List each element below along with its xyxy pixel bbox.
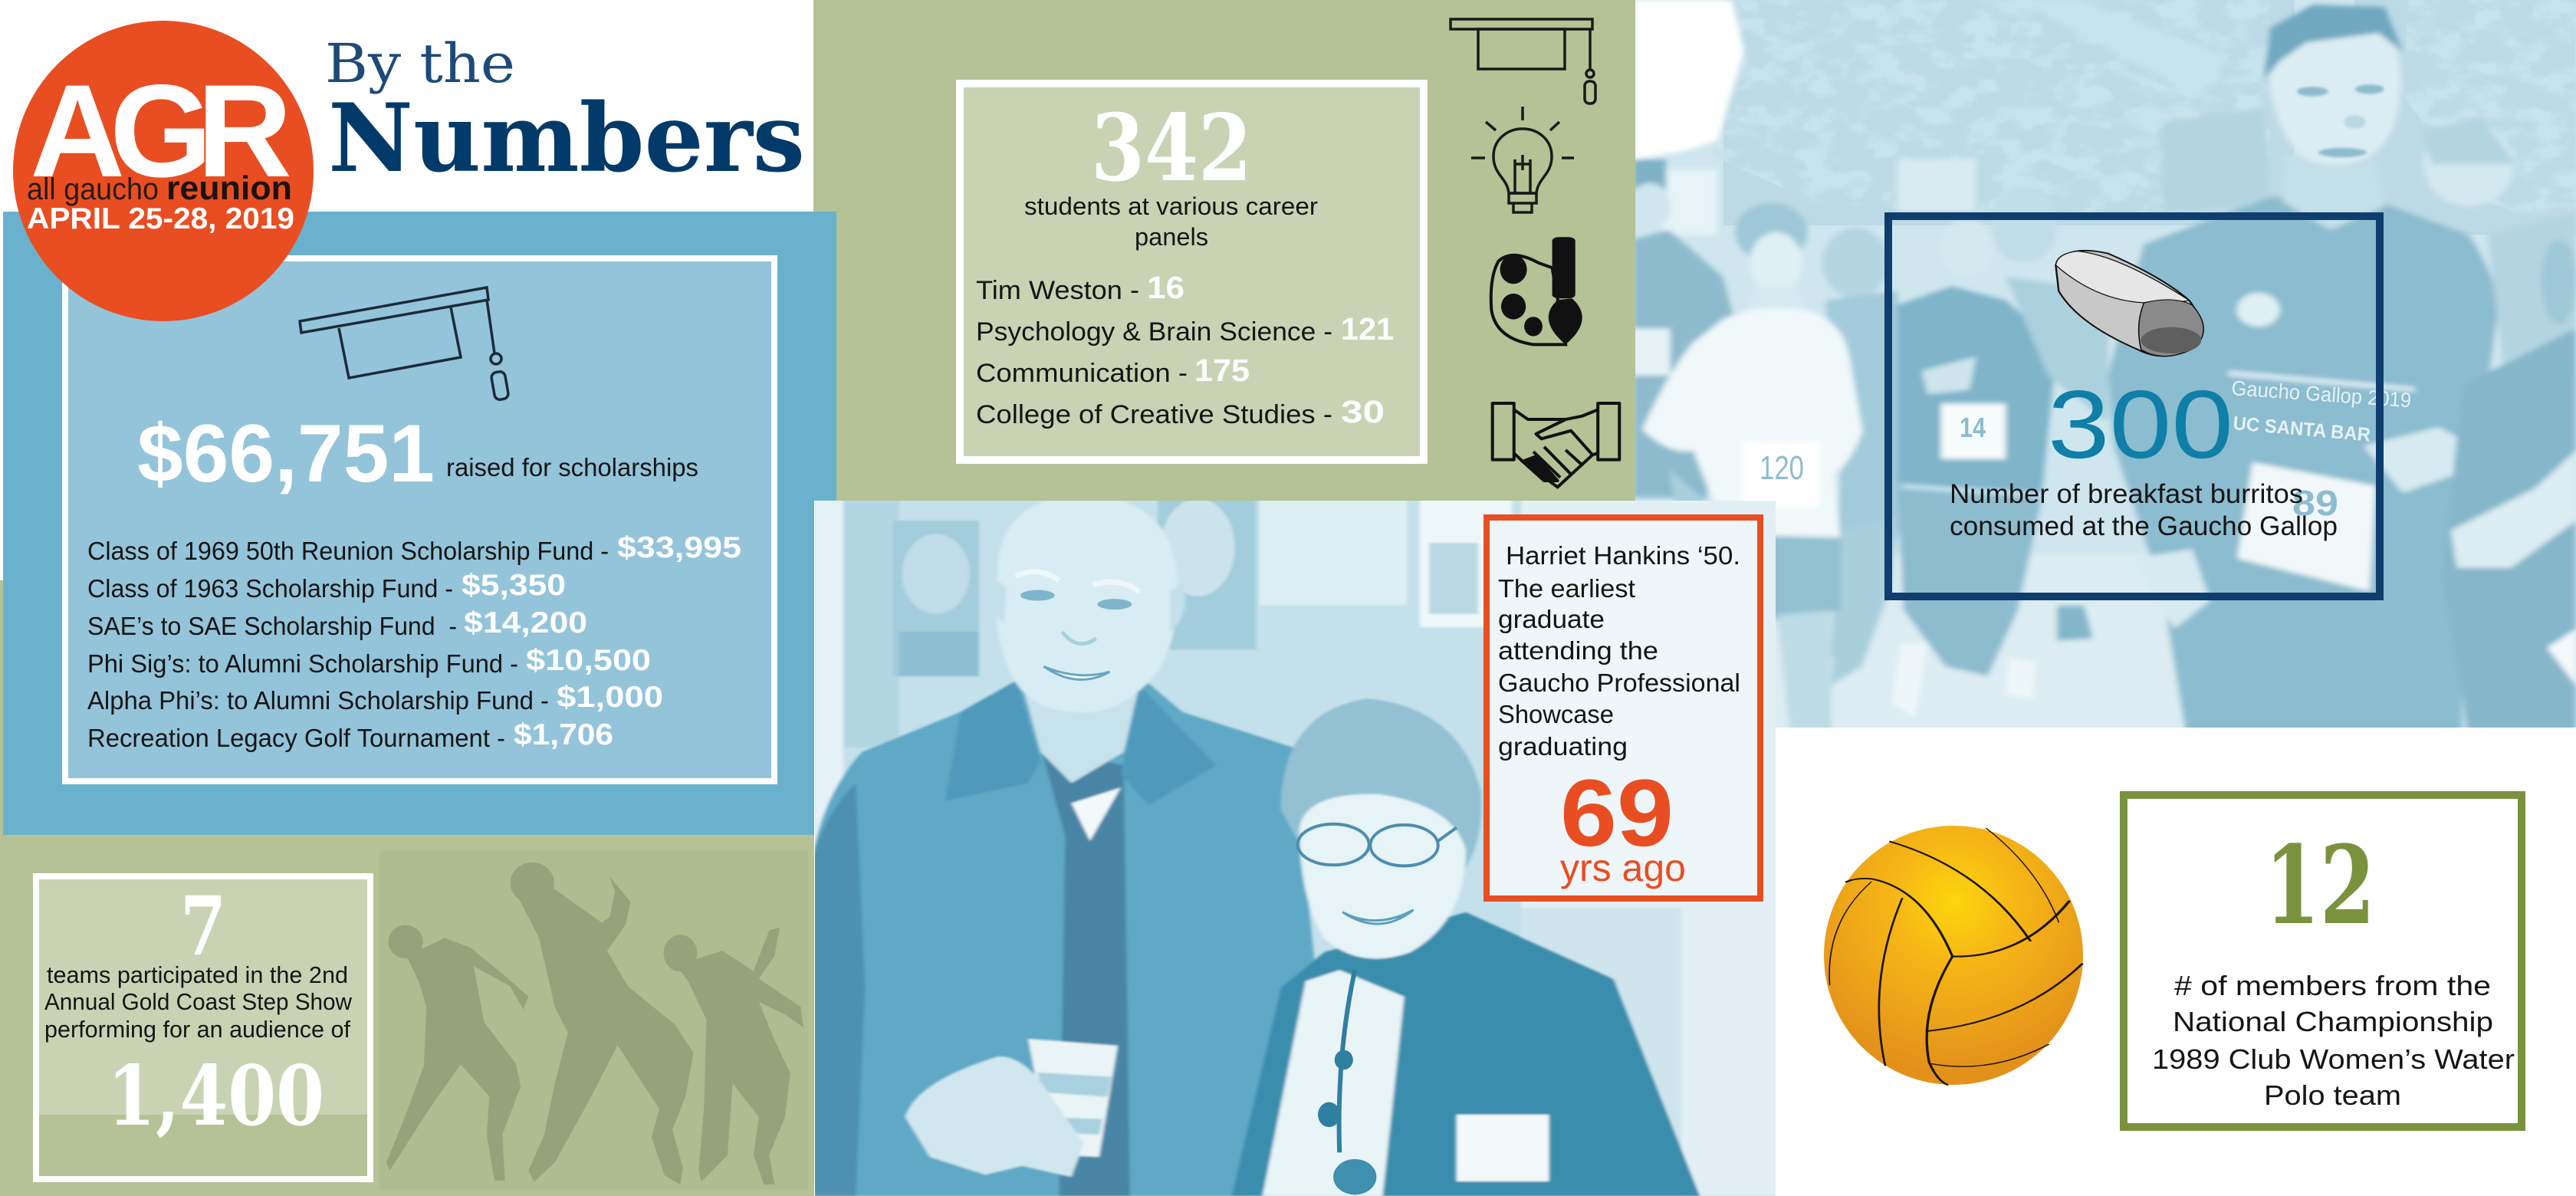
photo labels on shirt and bibs: Gaucho Gallop 2019 — [2231, 376, 2412, 412]
stat box: Harriet Hankins: yrs ago — [1560, 846, 1686, 889]
photo labels on shirt and bibs: UC SANTA BAR — [2232, 412, 2371, 446]
icon: water polo ball — [1824, 826, 2083, 1085]
photo: two alumni — [813, 494, 1779, 1196]
title: By the — [325, 32, 515, 95]
icon: palette and brush — [1491, 237, 1582, 344]
panel: step show — [0, 580, 814, 1196]
stat box: 342 students: 342 — [1091, 94, 1252, 202]
panel: career panels — [813, 0, 1635, 501]
badge: AGR logo: APRIL 25-28, 2019 — [27, 202, 294, 235]
stat box: step show teams: 1,400 — [107, 1048, 324, 1145]
panel: runners photo with burrito stat: 14 — [1960, 412, 1986, 443]
icon: graduation cap — [300, 288, 509, 400]
visor person — [2423, 122, 2514, 206]
stat box: scholarship total — [65, 258, 774, 781]
stat box: burritos: consumed at the Gaucho Gallop — [1950, 511, 2338, 541]
stat box: step show teams: performing for an audience of — [44, 1016, 350, 1043]
stat box: water polo team: National Championship — [2173, 1006, 2493, 1037]
stat box: 342 students — [960, 84, 1424, 460]
stat box: Harriet Hankins: 69 — [1560, 761, 1674, 866]
panel: Harriet Hankins photo with stat — [813, 494, 1779, 1196]
stat box: burritos: 300 — [2048, 370, 2233, 478]
woman body — [1232, 912, 1700, 1196]
stat box: Harriet Hankins: The earliest — [1498, 574, 1635, 603]
scholarship fund list: $10,500 — [526, 644, 651, 677]
panel: runners photo with burrito stat — [1629, 0, 2576, 736]
back runner — [2006, 277, 2108, 422]
photo: face details — [2297, 84, 2384, 157]
necklace — [1318, 970, 1376, 1194]
panel: runners photo with burrito stat: 120 — [1760, 449, 1804, 487]
icon: graduation cap — [1451, 19, 1595, 104]
stat box: 342 students: 175 — [1194, 353, 1250, 388]
faces: man — [1016, 572, 1139, 679]
icon: light bulb — [1471, 107, 1574, 212]
stat box: water polo team: # of members from the — [2174, 970, 2491, 1001]
stat box: 342 students: 121 — [1341, 311, 1394, 347]
scholarship fund list: Class of 1969 50th Reunion Scholarship Fund - — [87, 537, 609, 565]
back legs — [1829, 553, 1897, 685]
stat box: 342 students: College of Creative Studies - — [976, 400, 1332, 429]
stat box: Harriet Hankins: Showcase — [1498, 700, 1614, 728]
stat box: water polo team: 12 — [2265, 823, 2375, 949]
badge: AGR logo: all gaucho — [27, 172, 159, 206]
stat box: water polo team: Polo team — [2264, 1079, 2401, 1111]
stat box: Harriet Hankins — [1487, 518, 1760, 899]
title — [325, 32, 805, 194]
badge: AGR logo: AGR — [30, 58, 292, 205]
right runner — [2442, 329, 2576, 736]
badge: AGR logo: reunion — [166, 169, 292, 207]
woman in white — [1735, 203, 1807, 261]
man head — [996, 494, 1178, 712]
faces: woman glasses and smile — [1298, 824, 1457, 924]
panel: runners photo with burrito stat: 89 — [2292, 483, 2338, 523]
scholarship fund list: Class of 1963 Scholarship Fund - — [87, 574, 453, 603]
stat box: water polo team — [2124, 795, 2522, 1127]
cup and hand — [1028, 1039, 1118, 1157]
stat box: 342 students: Psychology & Brain Science - — [976, 317, 1332, 347]
stat box: burritos — [1888, 216, 2380, 596]
stat box: scholarship total: $66,751 — [137, 407, 435, 499]
scholarship fund list: Alpha Phi’s: to Alumni Scholarship Fund - — [87, 686, 549, 715]
woman head — [1281, 698, 1481, 876]
left man — [1633, 159, 1666, 197]
stat box: 342 students: 30 — [1341, 394, 1385, 429]
stat box: step show teams — [36, 876, 370, 1179]
scholarship fund list: Recreation Legacy Golf Tournament - — [87, 724, 505, 752]
scholarship fund list: $14,200 — [464, 606, 587, 639]
scholarship fund list: SAE’s to SAE Scholarship Fund - — [87, 612, 457, 640]
stat box: Harriet Hankins: Gaucho Professional — [1498, 669, 1740, 697]
photo: Gaucho Gallop runners — [1629, 0, 2576, 736]
mid runner — [1950, 220, 1984, 225]
icon: handshake — [1493, 403, 1619, 487]
scholarship fund list: $1,000 — [557, 681, 663, 714]
panel: scholarships — [3, 212, 836, 835]
scholarship fund list: $5,350 — [462, 569, 566, 602]
stat box: scholarship total: raised for scholarships — [446, 453, 698, 481]
stat box: 342 students: 16 — [1147, 270, 1184, 305]
stat box: 342 students: students at various career — [1024, 192, 1318, 220]
stat box: Harriet Hankins: attending the — [1498, 636, 1658, 665]
stat box: 342 students: panels — [1135, 223, 1208, 251]
photo labels on shirt and bibs — [2233, 380, 2410, 442]
scholarship fund list: $1,706 — [514, 718, 613, 751]
scholarship fund list — [87, 531, 741, 752]
stat box: water polo team: 1989 Club Women’s Water — [2152, 1043, 2515, 1075]
stat box: burritos: Number of breakfast burritos — [1950, 479, 2303, 509]
scholarship fund list: Phi Sig’s: to Alumni Scholarship Fund - — [87, 649, 518, 678]
man body — [813, 681, 1315, 1196]
stat box: Harriet Hankins: Harriet Hankins ‘50. — [1506, 541, 1740, 570]
stat box: 342 students: Tim Weston - — [976, 276, 1139, 305]
stat box: 342 students: Communication - — [976, 359, 1188, 388]
scholarship fund list: $33,995 — [617, 531, 741, 564]
stat box: step show teams: teams participated in the 2nd — [47, 961, 348, 988]
big man — [2108, 197, 2499, 736]
stat box: step show teams: Annual Gold Coast Step Show — [44, 988, 353, 1015]
icon: burrito — [2055, 251, 2203, 356]
stat box: Harriet Hankins: graduate — [1498, 605, 1605, 633]
title: Numbers — [328, 84, 805, 194]
stat box: step show teams: 7 — [180, 878, 226, 974]
badge: AGR logo — [13, 21, 314, 321]
silhouettes: step dancers — [380, 851, 809, 1190]
stat box: Harriet Hankins: graduating — [1498, 732, 1628, 761]
